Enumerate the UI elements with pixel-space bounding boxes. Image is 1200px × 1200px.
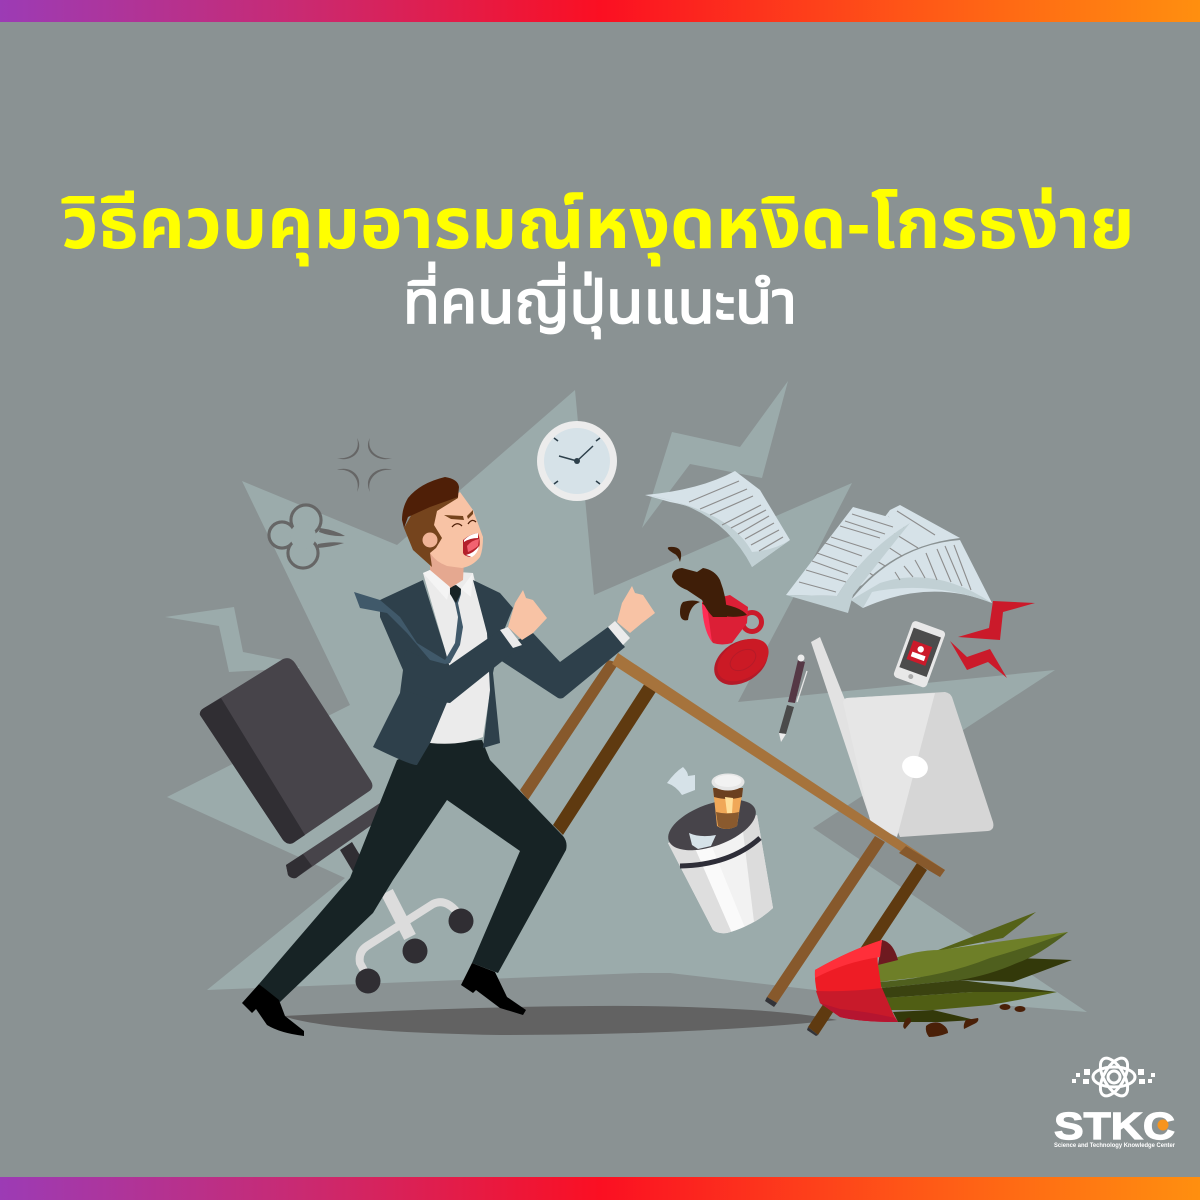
red lightning top bbox=[958, 601, 1035, 640]
burst background bbox=[165, 381, 1087, 1012]
leaves bbox=[933, 912, 1036, 952]
tie bbox=[354, 585, 463, 664]
desk front legs bbox=[765, 836, 927, 1036]
businessman bbox=[242, 477, 655, 1036]
far cuff bbox=[608, 621, 630, 645]
saucer bbox=[706, 630, 776, 694]
coffee cup spilling bbox=[668, 547, 776, 694]
cup bbox=[702, 595, 748, 644]
eyebrows bbox=[444, 510, 473, 520]
flying paper bbox=[645, 471, 790, 567]
top gradient bar bbox=[0, 0, 1200, 22]
bottom gradient bar bbox=[0, 1177, 1200, 1200]
logo tagline: Science and Technology Knowledge Center bbox=[1054, 1143, 1176, 1149]
logo wordmark: STKC bbox=[1054, 1106, 1175, 1148]
right sheet bbox=[851, 540, 992, 608]
steam cloud icon bbox=[269, 505, 345, 568]
droplets bbox=[668, 547, 700, 620]
far fist bbox=[617, 586, 655, 633]
near cuff bbox=[500, 627, 522, 648]
logo dots bbox=[1072, 1069, 1155, 1084]
near arm bbox=[403, 630, 520, 703]
STKC logo bbox=[1054, 1054, 1176, 1149]
paper stack bbox=[786, 505, 992, 613]
far arm bbox=[495, 627, 625, 698]
crumpled tissue bbox=[667, 767, 695, 795]
fallen plant bbox=[815, 912, 1072, 1037]
wall clock bbox=[537, 421, 617, 501]
takeaway cup bbox=[713, 788, 743, 829]
collar bbox=[423, 570, 473, 600]
open mouth bbox=[463, 533, 480, 557]
soil bbox=[926, 1022, 948, 1037]
neck bbox=[430, 552, 464, 590]
upper hair bbox=[402, 477, 459, 528]
right shoe bbox=[461, 963, 526, 1015]
phone bbox=[893, 620, 946, 688]
ear bbox=[422, 532, 438, 548]
title: วิธีควบคุมอารมณ์หงุดหงิด-โกรธง่าย bbox=[61, 185, 1134, 267]
pen bbox=[779, 654, 807, 742]
atom mark bbox=[1093, 1054, 1135, 1100]
lower hair bbox=[404, 495, 458, 567]
red lightning bottom bbox=[950, 641, 1007, 678]
trousers bbox=[259, 740, 567, 1002]
office chair bbox=[200, 658, 474, 994]
bin band bbox=[680, 838, 760, 866]
pot bbox=[878, 940, 898, 965]
cup handle bbox=[742, 612, 762, 632]
trash can bbox=[667, 767, 773, 934]
desk back legs bbox=[520, 660, 657, 835]
bin opening bbox=[662, 790, 762, 860]
coffee splash bbox=[672, 568, 727, 617]
closed eyes bbox=[452, 520, 476, 527]
near fist bbox=[508, 590, 547, 640]
bin body bbox=[668, 815, 773, 934]
shirt bbox=[423, 570, 493, 744]
logo orange dot bbox=[1158, 1120, 1168, 1130]
paper in bin bbox=[689, 833, 716, 849]
jacket bbox=[373, 580, 450, 765]
anger marks icon bbox=[337, 438, 392, 492]
subtitle: ที่คนญี่ปุ่นแนะนำ bbox=[403, 262, 797, 339]
coffee surface bbox=[702, 603, 747, 617]
ground shadow bbox=[283, 1006, 837, 1035]
saucer ring bbox=[726, 645, 760, 675]
face bbox=[430, 492, 483, 568]
front sheet bbox=[786, 507, 910, 596]
middle sheet bbox=[852, 505, 960, 590]
left shoe bbox=[242, 984, 304, 1036]
desk top bbox=[612, 653, 945, 877]
laptop bbox=[811, 637, 993, 837]
